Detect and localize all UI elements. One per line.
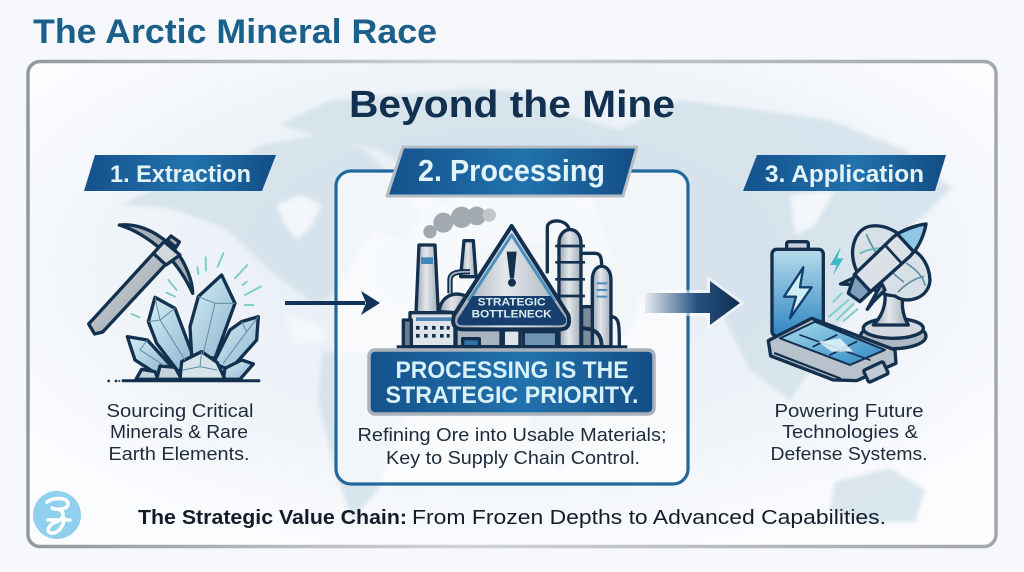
icon: logo badge: [33, 491, 81, 539]
icon: pickaxe and crystals: [89, 225, 261, 382]
text: application description: Technologies &: [782, 421, 919, 442]
panel: processing box: [336, 171, 688, 484]
title: The Arctic Mineral Race: [33, 13, 437, 51]
text: extraction description: Sourcing Critical: [106, 400, 254, 421]
text: processing description: [358, 424, 666, 468]
callout: strategic priority: STRATEGIC PRIORITY.: [386, 382, 638, 409]
caption: strategic value chain: [138, 507, 886, 529]
icon: refinery with warning sign: STRATEGIC: [478, 297, 546, 309]
callout: strategic priority: [369, 350, 654, 414]
icon: crystals: [127, 275, 258, 379]
chimneys: [416, 245, 438, 313]
text: application description: Powering Future: [774, 400, 924, 421]
heading: Beyond the Mine: [349, 84, 675, 126]
ground line: [107, 379, 260, 382]
text: application description: [770, 400, 928, 464]
icon: solar panel device: [768, 318, 896, 383]
smoke: [423, 207, 496, 238]
text: extraction description: Earth Elements.: [108, 443, 250, 464]
arrow: extraction to processing: [285, 291, 380, 315]
ground: [397, 345, 627, 348]
icon: speed lines: [829, 293, 857, 321]
banner: processing: [387, 147, 637, 196]
icon: battery, missile, dish, solar panel: [768, 224, 930, 383]
text: processing description: Refining Ore into Usable Materials;: [358, 424, 666, 445]
pipes: [450, 272, 470, 293]
icon: refinery with warning sign: BOTTLENECK: [472, 309, 552, 321]
callout: strategic priority: PROCESSING IS THE: [396, 357, 628, 384]
caption: strategic value chain: From Frozen Depths to Advanced Capabilities.: [412, 507, 886, 529]
icon: satellite dish: [853, 226, 930, 349]
banner: application: 3. Application: [765, 161, 924, 188]
text: processing description: Key to Supply Chain Control.: [386, 447, 640, 468]
sign label: [457, 296, 566, 325]
base buildings: [456, 327, 501, 347]
icon: refinery with warning sign: [397, 207, 627, 348]
icon: missile: [841, 224, 926, 309]
text: extraction description: [106, 400, 254, 464]
towers: [559, 230, 581, 347]
icon: battery: [772, 242, 823, 336]
warning triangle: [453, 226, 569, 329]
banner: processing: 2. Processing: [418, 153, 605, 188]
icon: small lightning: [830, 247, 843, 276]
text: extraction description: Minerals & Rare: [110, 421, 248, 442]
banner: extraction: 1. Extraction: [110, 161, 251, 188]
caption: strategic value chain: The Strategic Value Chain:: [138, 507, 407, 529]
banner: application: [743, 155, 946, 191]
icon: sparkle lines: [132, 253, 261, 317]
banner: extraction: [84, 155, 276, 191]
text: application description: Defense Systems.: [770, 443, 928, 464]
icon: pickaxe: [89, 225, 193, 334]
arrow: processing to application: [645, 276, 745, 330]
world map background: [122, 88, 952, 522]
exclamation mark: [507, 252, 517, 278]
